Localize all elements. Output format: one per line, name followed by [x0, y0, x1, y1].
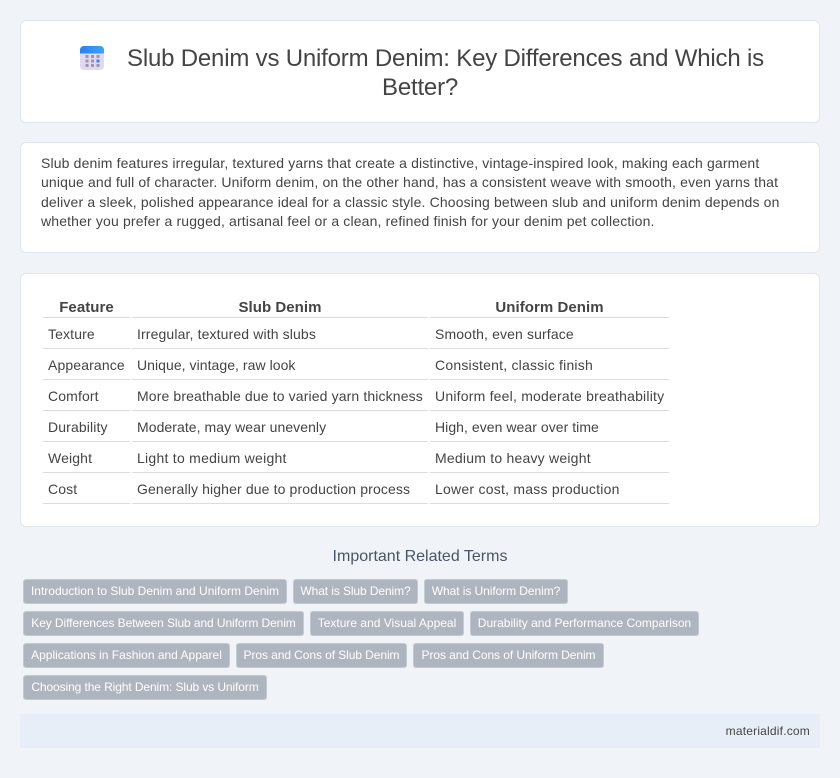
comparison table: More breathable due to varied yarn thickness — [137, 388, 423, 404]
related terms tags: Texture and Visual Appeal — [318, 616, 456, 630]
comparison table: Consistent, classic finish — [435, 357, 593, 373]
related terms tags: Choosing the Right Denim: Slub vs Uniform — [31, 680, 259, 694]
intro text: unique and full of character. Uniform denim, on the other hand, has a consistent weave with smooth, even yarns that — [41, 174, 778, 190]
intro text: Slub denim features irregular, textured yarns that create a distinctive, vintage-inspired look, making each garment — [41, 154, 759, 170]
comparison table: Weight — [48, 450, 92, 466]
comparison table: Light to medium weight — [137, 450, 287, 466]
comparison table: Durability — [48, 419, 108, 435]
comparison table panel — [20, 273, 820, 527]
title: Slub Denim vs Uniform Denim: Key Differences and Which is — [127, 45, 764, 72]
comparison table: Cost — [48, 481, 77, 497]
comparison table: Medium to heavy weight — [435, 450, 591, 466]
comparison table: Slub Denim — [238, 299, 322, 316]
header panel — [20, 20, 820, 123]
comparison table: Uniform feel, moderate breathability — [435, 388, 664, 404]
comparison table: Moderate, may wear unevenly — [137, 419, 326, 435]
related terms tags: What is Slub Denim? — [300, 584, 411, 598]
related terms tags — [23, 579, 699, 700]
comparison table: Generally higher due to production process — [137, 481, 410, 497]
intro panel — [20, 142, 820, 253]
related terms tags: Durability and Performance Comparison — [478, 616, 691, 630]
intro text: whether you prefer a rugged, artisanal feel or a clean, refined finish for your denim pet collection. — [41, 213, 655, 229]
comparison table: Comfort — [48, 388, 99, 404]
comparison table: Feature — [59, 299, 114, 316]
comparison table: Appearance — [48, 357, 125, 373]
comparison table: Smooth, even surface — [435, 326, 574, 342]
footer source: materialdif.com — [726, 724, 810, 738]
footer bar — [20, 714, 820, 748]
related terms tags: Pros and Cons of Uniform Denim — [422, 648, 595, 662]
related terms tags: What is Uniform Denim? — [432, 584, 560, 598]
comparison table: High, even wear over time — [435, 419, 599, 435]
related terms tags: Key Differences Between Slub and Uniform Denim — [31, 616, 296, 630]
comparison table — [43, 299, 669, 504]
related terms tags: Introduction to Slub Denim and Uniform Denim — [31, 584, 279, 598]
comparison table: Unique, vintage, raw look — [137, 357, 295, 373]
title — [127, 45, 764, 101]
comparison table: Lower cost, mass production — [435, 481, 620, 497]
related terms heading: Important Related Terms — [333, 548, 507, 565]
related terms tags: Pros and Cons of Slub Denim — [244, 648, 399, 662]
comparison table: Irregular, textured with slubs — [137, 326, 316, 342]
related terms tags: Applications in Fashion and Apparel — [31, 648, 222, 662]
title: Better? — [382, 74, 458, 101]
icon: calendar — [80, 46, 104, 70]
intro text — [41, 154, 780, 229]
comparison table: Texture — [48, 326, 95, 342]
comparison table: Uniform Denim — [495, 299, 604, 316]
intro text: deliver a sleek, polished appearance ideal for a classic style. Choosing between slub and uniform denim depends on — [41, 194, 780, 210]
